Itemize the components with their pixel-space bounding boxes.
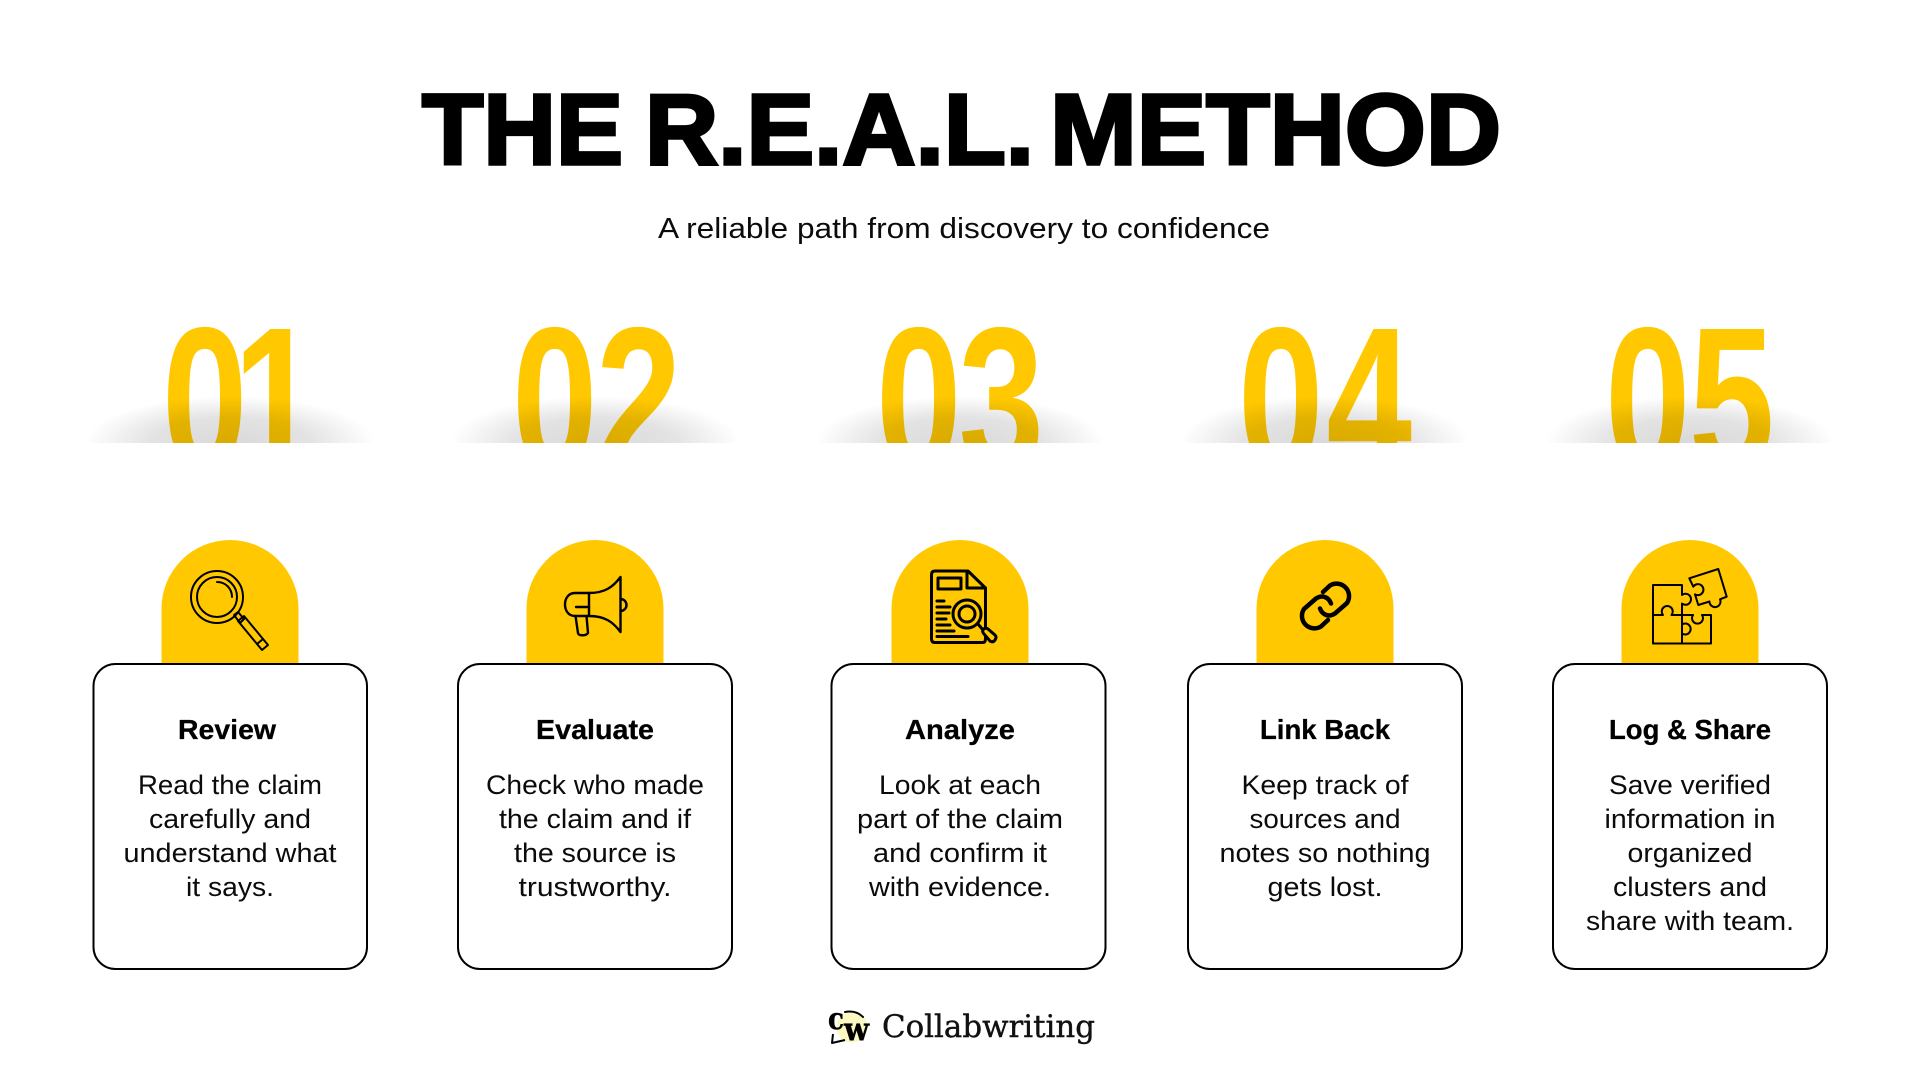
tab <box>162 540 298 664</box>
body text: Save verified <box>1609 770 1771 800</box>
tab <box>1256 540 1394 664</box>
title <box>422 74 1501 186</box>
card <box>458 664 732 969</box>
panel: step 2 Evaluate <box>458 540 732 969</box>
body text: understand what <box>124 838 337 868</box>
body text <box>1220 770 1430 902</box>
title: THE <box>422 74 623 186</box>
tab <box>1622 540 1758 664</box>
body text: and confirm it <box>873 838 1048 868</box>
panel: step 5 Log & Share <box>1553 540 1827 969</box>
heading: Log & Share <box>1609 714 1771 745</box>
logo icon: w <box>843 1010 870 1048</box>
title: R.E.A.L. <box>645 74 1034 186</box>
body text: organized <box>1628 838 1752 868</box>
body text: it says. <box>186 872 274 902</box>
logo icon <box>828 1002 870 1048</box>
heading: Review <box>178 714 276 745</box>
heading: Evaluate <box>536 714 654 745</box>
card <box>832 664 1106 969</box>
body text: the claim and if <box>499 804 692 834</box>
body text <box>1586 770 1794 936</box>
body text: clusters and <box>1613 872 1767 902</box>
number 03 <box>835 326 1085 443</box>
logo wordmark: Collabwriting <box>882 1009 1095 1045</box>
title: METHOD <box>1050 74 1501 186</box>
number 02 <box>470 326 720 443</box>
panel: step 4 Link Back <box>1188 540 1462 969</box>
number 04: 04 <box>1238 286 1412 514</box>
body text: share with team. <box>1586 906 1794 936</box>
tab <box>892 540 1028 664</box>
logo icon: c <box>828 1002 844 1037</box>
icon: magnifying glass <box>191 571 268 650</box>
subtitle: A reliable path from discovery to confidence <box>658 213 1270 245</box>
body text: gets lost. <box>1268 872 1382 902</box>
number 02: 02 <box>512 286 682 514</box>
number 01: 01 <box>162 286 319 514</box>
body text <box>857 770 1063 902</box>
card <box>1553 664 1827 969</box>
body text: the source is <box>514 838 676 868</box>
body text: trustworthy. <box>518 872 672 902</box>
infographic canvas <box>92 92 1828 1044</box>
heading: Link Back <box>1260 714 1390 745</box>
icon: megaphone <box>565 577 626 635</box>
number row <box>105 326 1815 443</box>
body text: carefully and <box>149 804 311 834</box>
number 04 <box>1200 326 1450 443</box>
number 05 <box>1565 326 1815 443</box>
number 05: 05 <box>1605 286 1775 514</box>
panel: step 1 Review <box>94 540 367 969</box>
number 03: 03 <box>876 286 1044 514</box>
body text <box>486 770 704 902</box>
icon: puzzle pieces <box>1653 569 1727 644</box>
body text: Keep track of <box>1242 770 1409 800</box>
body text <box>124 770 337 902</box>
body text: notes so nothing <box>1220 838 1430 868</box>
body text: part of the claim <box>857 804 1063 834</box>
card <box>94 664 367 969</box>
body text: with evidence. <box>868 872 1051 902</box>
card <box>1188 664 1462 969</box>
body text: Read the claim <box>138 770 322 800</box>
panel: step 3 Analyze <box>832 540 1106 969</box>
heading: Analyze <box>905 714 1015 745</box>
number 01 <box>105 326 355 443</box>
body text: sources and <box>1250 804 1400 834</box>
body text: Look at each <box>879 770 1041 800</box>
body text: Check who made <box>486 770 704 800</box>
tab <box>526 540 664 664</box>
icon: document with magnifier <box>932 571 996 642</box>
logo: Collabwriting <box>828 1002 1095 1048</box>
body text: information in <box>1604 804 1776 834</box>
icon: chain link <box>1302 584 1349 628</box>
